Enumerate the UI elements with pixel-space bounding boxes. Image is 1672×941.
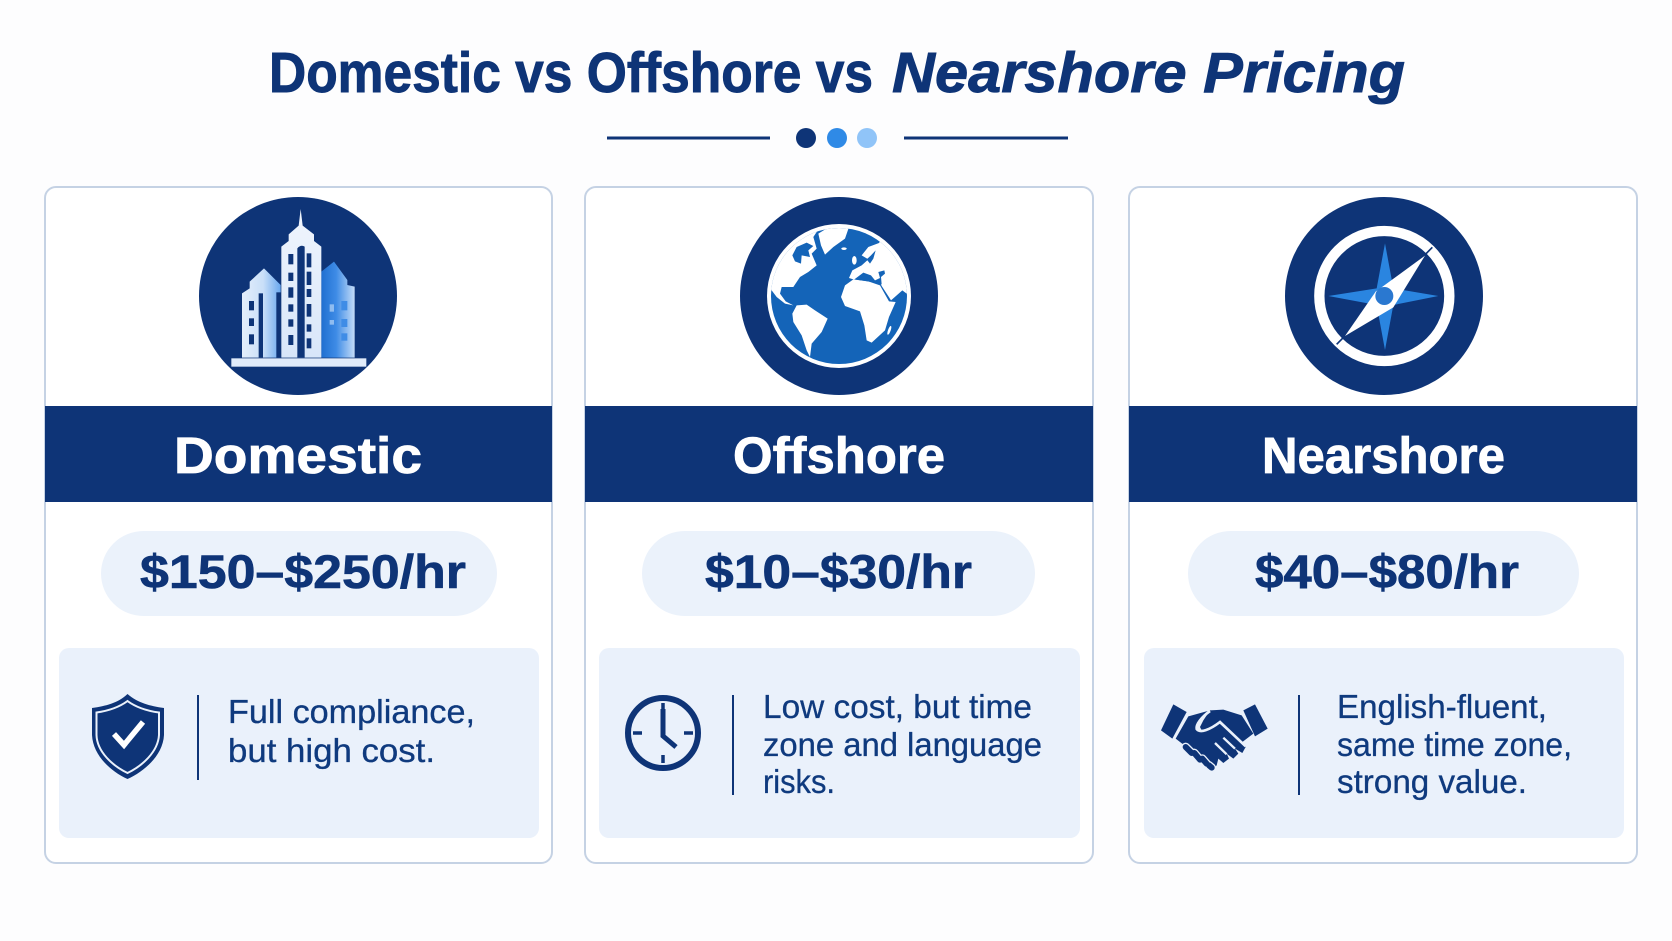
icon: globe: [740, 197, 938, 395]
panel: offshore: [585, 187, 1093, 863]
panel: nearshore: [1129, 187, 1637, 863]
icon: compass: [1285, 197, 1483, 395]
price pill: offshore: $10–$30/hr: [705, 545, 972, 598]
note text: same time zone,: [1337, 726, 1572, 763]
note text: strong value.: [1337, 763, 1527, 800]
note box: nearshore: [1144, 648, 1624, 838]
heading bar: nearshore: Nearshore: [1262, 427, 1505, 484]
title divider with dots: [607, 128, 1068, 148]
icon: clock: [628, 698, 698, 768]
title: [269, 41, 1405, 105]
heading bar: nearshore: [1129, 406, 1637, 502]
price pill: domestic: $150–$250/hr: [140, 545, 466, 598]
note text: Low cost, but time: [763, 688, 1032, 725]
heading bar: offshore: [585, 406, 1093, 502]
note text: English-fluent,: [1337, 688, 1547, 725]
price pill: nearshore: [1188, 531, 1579, 616]
icon: city buildings: [199, 197, 397, 395]
note text: but high cost.: [228, 732, 435, 769]
title: Domestic vs Offshore vs: [269, 41, 873, 105]
note text: [228, 693, 475, 769]
heading bar: domestic: Domestic: [174, 427, 422, 484]
icon: handshake: [1161, 704, 1268, 770]
note text: [1337, 688, 1572, 800]
note text: zone and language: [763, 726, 1042, 763]
price pill: offshore: [642, 531, 1035, 616]
panel: domestic: [45, 187, 552, 863]
note box: domestic: [59, 648, 539, 838]
price pill: domestic: [101, 531, 497, 616]
title: Nearshore Pricing: [892, 41, 1405, 105]
heading bar: offshore: Offshore: [733, 427, 945, 484]
note text: Full compliance,: [228, 693, 475, 730]
note text: [763, 688, 1042, 800]
note box: offshore: [599, 648, 1080, 838]
heading bar: domestic: [45, 406, 552, 502]
note text: risks.: [763, 763, 835, 800]
icon: shield with check: [92, 694, 164, 779]
price pill: nearshore: $40–$80/hr: [1255, 545, 1519, 598]
